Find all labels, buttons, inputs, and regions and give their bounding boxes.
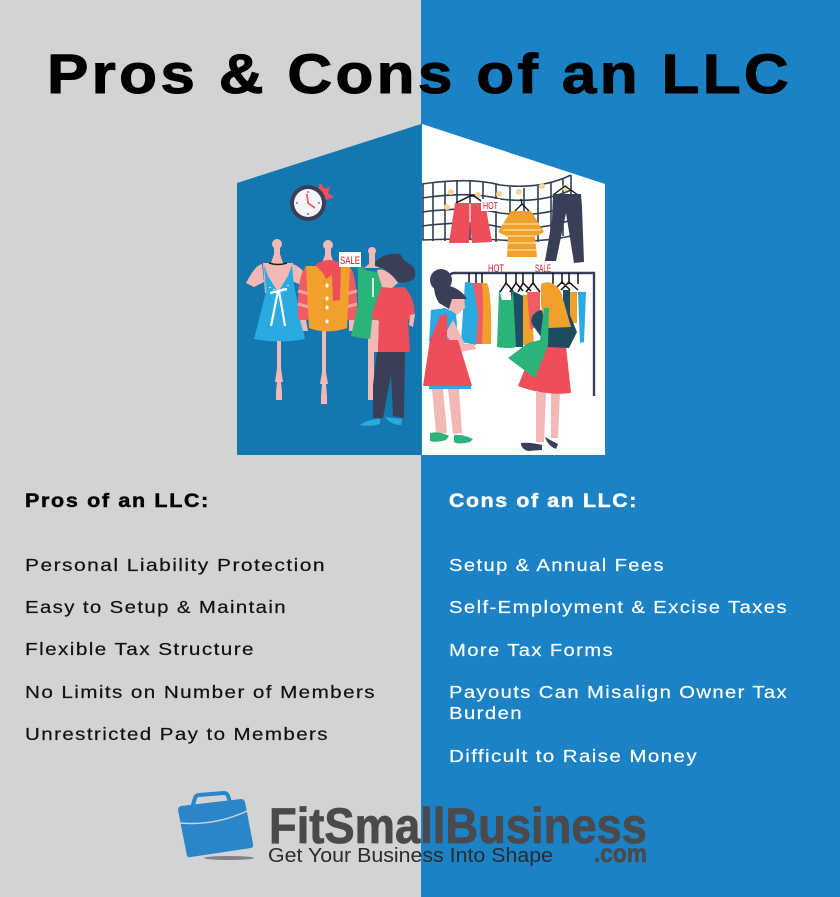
sale tag bbox=[339, 252, 361, 267]
mannequin: orange cardigan bbox=[298, 240, 357, 404]
pro item 5: Unrestricted Pay to Members bbox=[25, 724, 329, 744]
striped orange t-shirt bbox=[498, 199, 544, 257]
shopper: woman in red top bbox=[360, 254, 415, 426]
con item 1: Setup & Annual Fees bbox=[449, 555, 665, 575]
shopper: woman in blue top with red apron dress bbox=[423, 269, 476, 444]
pro item 1: Personal Liability Protection bbox=[25, 555, 326, 575]
icon: wall clock bbox=[290, 183, 334, 221]
pro item 3: Flexible Tax Structure bbox=[25, 639, 255, 659]
mannequin: blue dress bbox=[246, 239, 310, 400]
background: right blue panel bbox=[421, 0, 840, 897]
string lights bbox=[444, 183, 568, 210]
sale tag: SALE bbox=[340, 255, 360, 267]
con item 3: More Tax Forms bbox=[449, 640, 614, 660]
list: cons bbox=[449, 555, 788, 766]
background: left grey panel bbox=[0, 0, 421, 897]
clothes rack: SALE bbox=[535, 263, 551, 275]
clothes rack: HOT bbox=[488, 263, 504, 275]
hot tag on grid: HOT bbox=[483, 201, 498, 212]
hot tag on grid bbox=[481, 199, 500, 212]
illustration: house bbox=[237, 124, 605, 455]
heading: cons: Cons of an LLC: bbox=[449, 491, 638, 512]
clothes rack bbox=[451, 263, 594, 396]
list: pros bbox=[25, 555, 376, 744]
logo: Fit Small Business bbox=[178, 793, 647, 868]
con item 5: Difficult to Raise Money bbox=[449, 746, 698, 766]
icon: briefcase bbox=[178, 793, 254, 860]
pro item 4: No Limits on Number of Members bbox=[25, 682, 376, 702]
wire grid with hanging lights bbox=[422, 175, 571, 243]
red shorts bbox=[449, 196, 492, 243]
dark trousers bbox=[545, 186, 584, 263]
con item 2: Self-Employment & Excise Taxes bbox=[449, 597, 788, 617]
heading: pros: Pros of an LLC: bbox=[25, 491, 210, 512]
mannequin: green dress bbox=[351, 247, 392, 400]
title: Pros & Cons of an LLC bbox=[47, 42, 792, 105]
logo wordmark: FitSmallBusiness bbox=[269, 798, 647, 854]
shopper: woman with orange hair and green bag bbox=[508, 282, 577, 451]
con item 4: Payouts Can Misalign Owner Tax bbox=[449, 682, 788, 702]
logo tagline: Get Your Business Into Shape bbox=[268, 845, 553, 867]
logo .com: .com bbox=[594, 838, 647, 868]
list: cons: Burden bbox=[449, 703, 523, 723]
house left wall bbox=[237, 124, 421, 455]
house right wall bbox=[422, 124, 605, 455]
pro item 2: Easy to Setup & Maintain bbox=[25, 597, 287, 617]
hanging clothes bbox=[461, 282, 586, 348]
